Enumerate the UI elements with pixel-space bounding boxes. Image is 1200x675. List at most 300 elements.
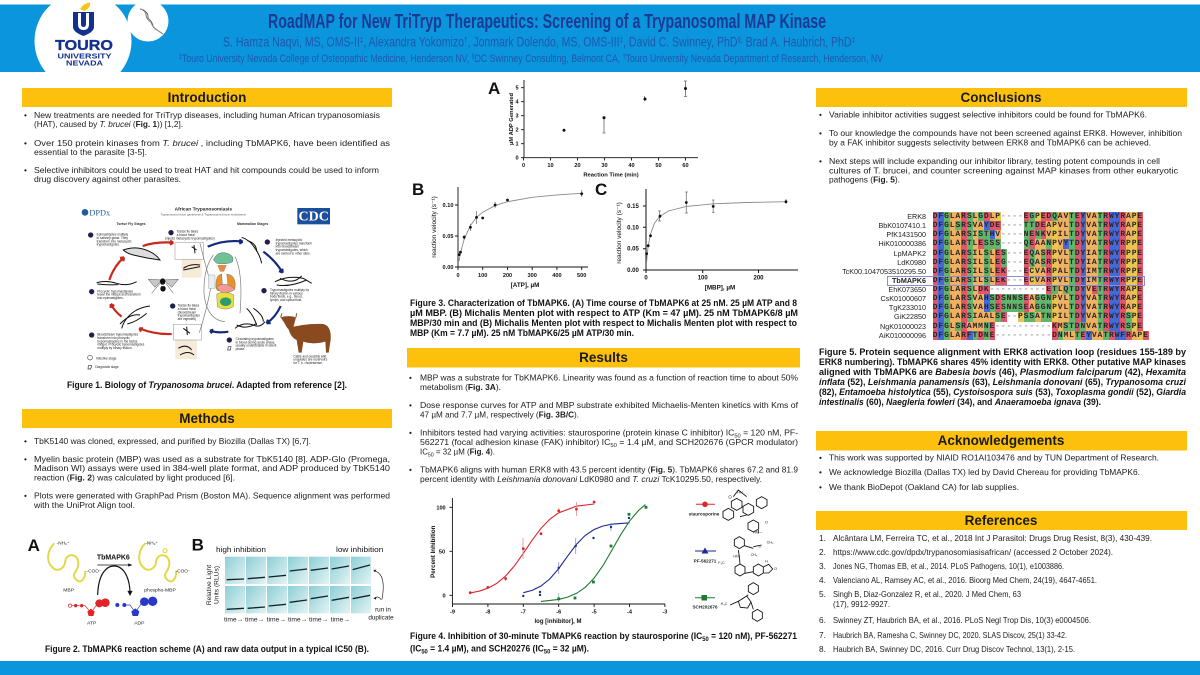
figure 5: sequence alignment: D: [933, 303, 938, 312]
figure 5: sequence alignment: LA: [950, 285, 961, 294]
figure 1: trypanosome life cycle: [82, 207, 331, 369]
figure 5: sequence alignment: R: [1120, 303, 1126, 312]
figure 5: sequence alignment: Y: [1081, 221, 1086, 230]
figure 5: sequence alignment: Q: [1029, 248, 1035, 258]
figure 5: sequence alignment: T: [972, 331, 978, 340]
structure: SCH202676: H₃C: [721, 602, 728, 606]
chart 3A: time course: [488, 79, 698, 178]
figure 5: sequence alignment: D: [933, 230, 938, 239]
chart 3B: ATP Michaelis-Menten: 0.00: [443, 265, 453, 271]
figure 5: sequence alignment: P: [1052, 312, 1058, 321]
figure 5: sequence alignment: S: [1126, 322, 1132, 330]
figure 5: sequence alignment: F: [938, 267, 944, 276]
structure: staurosporine: HN—: [753, 530, 763, 534]
figure 5: sequence alignment: PP: [1126, 267, 1137, 276]
figure 5: sequence alignment: E: [1137, 267, 1143, 276]
figure 5: sequence alignment: Y: [984, 221, 990, 230]
authors: §,: [737, 36, 743, 44]
figure 5: sequence alignment: F: [938, 322, 944, 330]
figure 5: sequence alignment: Y: [1081, 303, 1086, 312]
figure 5: sequence alignment: R: [961, 258, 967, 267]
stage descriptions: multiply by binary fission.: [97, 346, 133, 350]
figure 5: sequence alignment: T: [1069, 239, 1075, 248]
chart: figure 4 dose-response curves: log [inhibitor], M: [534, 619, 582, 625]
authors: ‡: [360, 36, 363, 44]
figure 5: sequence alignment: VA: [1086, 212, 1098, 221]
chart 3B: ATP Michaelis-Menten: 300: [528, 273, 537, 279]
panel: introduction: [22, 88, 392, 390]
PF-562271 curve: [522, 517, 630, 597]
figure 5: sequence alignment: E: [1137, 248, 1143, 258]
figure 5: sequence alignment: S: [984, 248, 990, 258]
figure 5: sequence alignment: IM: [1086, 267, 1098, 276]
text block: conclusions bullets: pathogens (Fig. 5).: [829, 175, 900, 185]
figure 5: sequence alignment: TcK00.1047053510295.50: [842, 267, 926, 276]
figure 5: sequence alignment: WY: [1109, 267, 1120, 276]
text block: results bullets: Fig. 4).: [470, 446, 495, 456]
text block: acknowledgements bullets: We thank BioDepot (Oakland CA) for lab supplies.: [829, 482, 1019, 492]
caption: figure 5: [819, 347, 1187, 407]
chart 3A: time course: Reaction Time (min): [583, 172, 639, 178]
stage descriptions: transform into metacyclic: [97, 239, 132, 243]
figure 5: sequence alignment: ST: [978, 230, 990, 239]
figure 5: sequence alignment: F: [938, 230, 944, 239]
figure 5: sequence alignment: G: [944, 221, 950, 230]
chart 3A: time course: 40: [628, 163, 635, 169]
stage descriptions: Circulating trypomastigotes: [236, 337, 274, 341]
figure 5: sequence alignment: N: [1080, 322, 1086, 330]
figure 5: sequence alignment: SNNS: [1001, 303, 1024, 312]
figure 5: sequence alignment: VA: [972, 221, 984, 230]
staurosporine curve: [469, 501, 595, 594]
figure 5: sequence alignment: R: [1103, 285, 1109, 294]
figure 5: sequence alignment: R: [1046, 258, 1052, 267]
figure 5: sequence alignment: WY: [1109, 303, 1120, 312]
chart 3A: time course: 20: [574, 163, 581, 169]
figure 5: sequence alignment: R: [1046, 276, 1052, 285]
figure 5: sequence alignment: P: [1132, 294, 1137, 303]
text block: results bullets: 47 µM and 7.7 µM, respectively (Fig. 3B/C).: [420, 410, 579, 420]
figure 5: sequence alignment: T: [1098, 322, 1103, 330]
figure 5: sequence alignment: EhK073650: [888, 285, 926, 294]
figure 5: sequence alignment: E: [1137, 221, 1143, 230]
stage descriptions: trypomastigotes: [178, 314, 200, 318]
TbMAPK6 arrows: TbMAPK6: [97, 555, 130, 562]
stage descriptions: into bloodstream: [276, 245, 299, 249]
figure 5: sequence alignment: L: [1058, 285, 1063, 294]
affiliations: DC Swinney Consulting, Belmont CA,: [475, 53, 623, 65]
figure 5: sequence alignment: VA: [1086, 230, 1098, 239]
figure 5: sequence alignment: T: [1098, 221, 1103, 230]
figure 5: sequence alignment: A: [1126, 285, 1132, 294]
text block: reference list: Haubrich BA, Swinney DC, 2016. Curr Drug Discov Technol, 13(1), 2-15.: [833, 644, 1075, 654]
figure 5: sequence alignment: R: [1103, 221, 1109, 230]
figure 5: sequence alignment: T: [1098, 285, 1103, 294]
stage descriptions: Trypomastigotes multiply by: [270, 288, 309, 292]
figure 5: sequence alignment: A: [1126, 212, 1132, 221]
header banner: [0, 0, 1200, 90]
figure 5: sequence alignment: LA: [950, 303, 961, 312]
chart 3B: ATP Michaelis-Menten: 400: [552, 273, 562, 279]
chart 3A: time course: 30: [601, 163, 608, 169]
figure 5: sequence alignment: T: [1103, 331, 1109, 340]
phospho-MBP product: [139, 541, 191, 593]
chart: figure 4 dose-response curves: -4: [627, 610, 633, 616]
figure 5: sequence alignment: F: [967, 331, 972, 340]
authors: , Jonmark Dolendo, MS, OMS-III: [467, 34, 620, 50]
chart: figure 4 dose-response curves: -3: [662, 610, 667, 616]
logo: Touro University Nevada: TOURO: [55, 37, 113, 54]
numbered stage markers: [88, 230, 270, 343]
figure 5: sequence alignment: G: [944, 248, 950, 258]
figure 5: sequence alignment: S: [967, 230, 972, 239]
figure 5: sequence alignment: AA: [1035, 239, 1046, 248]
text block: reference list: 7.: [819, 630, 826, 640]
caption: figure 4: 50: [702, 637, 709, 643]
ATP: [68, 598, 110, 626]
stage descriptions: usually undetectable in latent: [236, 344, 276, 348]
figure 5: sequence alignment: VA: [1086, 239, 1098, 248]
figure 5: sequence alignment: SSS: [984, 239, 1001, 248]
text block: results bullets: •: [409, 400, 412, 410]
figure 5: sequence alignment: EK: [995, 276, 1007, 285]
figure 5: sequence alignment: G: [1029, 212, 1035, 221]
text block: introduction bullets: Selective inhibitors could be used to treat HAT and hit compounds could be used to inform: [34, 165, 379, 175]
figure 5: sequence alignment: IAAL: [972, 312, 995, 321]
figure 5: sequence alignment: WY: [1109, 312, 1120, 321]
chart 3C: MBP Michaelis-Menten: reaction velocity (s⁻¹): [616, 202, 623, 264]
figure 5: sequence alignment: TT: [1024, 221, 1035, 230]
chart 3A: time course: 0: [522, 163, 525, 169]
figure 5: sequence alignment: R: [961, 312, 967, 321]
text block: conclusions bullets: cultures of T. brucei, and counter screening against MAP kinases from other eukaryotic: [829, 165, 1178, 175]
stage descriptions: are carried to other sites.: [276, 251, 311, 255]
figure 5: sequence alignment: S: [967, 294, 972, 303]
figure 5: sequence alignment: G: [944, 312, 950, 321]
figure 5: sequence alignment: GGN: [1035, 294, 1052, 303]
figure 5: sequence alignment: D: [1075, 221, 1081, 230]
figure 5: sequence alignment: P: [1132, 303, 1137, 312]
figure 5: sequence alignment: A: [1126, 294, 1132, 303]
figure 5: sequence alignment: A: [1029, 294, 1035, 303]
figure 5: sequence alignment: WY: [1109, 294, 1120, 303]
text block: reference list: 3.: [819, 561, 826, 571]
heading: methods: [22, 409, 392, 428]
diagram legend: Diagnostic stage: [95, 365, 119, 369]
text block: introduction bullets: •: [24, 165, 27, 175]
caption: figure 3: µM MBP. (B) Michalis Menten plot with respect to ATP (Km = 47 µM). 25 nM TbMAPK6/8 µM: [410, 308, 798, 318]
figure 5: sequence alignment: E: [990, 322, 995, 330]
stage descriptions: Epimastigotes multiply: [97, 233, 128, 237]
chart 3B: ATP Michaelis-Menten: 0.10: [443, 203, 453, 209]
figure 5: sequence alignment: V: [1058, 239, 1063, 248]
legend: SCH202676: SCH202676: [692, 604, 718, 610]
figure 5: sequence alignment: R: [1120, 212, 1126, 221]
figure 5: sequence alignment: TN: [1041, 312, 1052, 321]
figure 5: sequence alignment: D: [978, 331, 984, 340]
figure 5: sequence alignment: Y: [1080, 285, 1086, 294]
chart 3B: ATP Michaelis-Menten: 0.05: [443, 234, 453, 240]
figure 5: sequence alignment: D: [933, 267, 938, 276]
figure 5: sequence alignment: Y: [1081, 230, 1086, 239]
figure 5: sequence alignment: L: [990, 212, 995, 221]
figure 5: sequence alignment: LA: [950, 239, 961, 248]
figure 5: sequence alignment: P: [1052, 230, 1058, 239]
figure 5: sequence alignment: R: [1120, 276, 1126, 285]
authors: Brad A. Haubrich, PhD: [743, 34, 852, 50]
figure 5: sequence alignment: E: [1143, 331, 1149, 340]
figure 5: sequence alignment: A: [1132, 331, 1137, 340]
caption: figure 4: = 120 nM), PF-562271: [709, 631, 797, 641]
figure 5: sequence alignment: T: [1098, 258, 1103, 267]
text block: methods bullets: [24, 436, 390, 510]
affiliations: §: [472, 54, 475, 61]
figure 5: sequence alignment: F: [938, 258, 944, 267]
text block: results bullets: 562271 (focal adhesion kinase (FAK) inhibitor) IC: [420, 437, 601, 447]
ADP: [115, 597, 157, 626]
figure 5: sequence alignment: R: [1103, 312, 1109, 321]
diagram title: Trypanosoma brucei gambiense & Trypanosoma brucei rhodesiense: [161, 213, 247, 217]
figure 5: sequence alignment: VA: [972, 294, 984, 303]
stage descriptions: Bloodstream trypomastigotes: [97, 333, 138, 337]
figure 5: sequence alignment: S: [955, 221, 961, 230]
chart: figure 4 dose-response curves: Percent Inhibition: [430, 525, 437, 578]
figure 5: sequence alignment: F: [938, 303, 944, 312]
chart 3C: MBP Michaelis-Menten: 0.05: [627, 247, 639, 253]
text block: reference list: Valenciano AL, Ramsey AC, et al., 2016. Bioorg Med Chem, 24(19), 4647-4651.: [833, 575, 1097, 585]
chart 3A: time course: A: [488, 79, 500, 98]
diagram legend: Infective stage: [96, 356, 117, 360]
figure 5: sequence alignment: P: [1052, 303, 1058, 312]
text block: methods bullets: Madison WI) assays were used in 384-well plate format, and ADP produced by TbK5140: [34, 463, 390, 473]
figure 2B: raw data plate: B: [192, 536, 204, 555]
figure 5: sequence alignment: M: [1058, 322, 1063, 330]
figure 5: sequence alignment: [842, 212, 1149, 340]
figure 5: sequence alignment: C: [1029, 267, 1035, 276]
text block: reference list: 4.: [819, 575, 826, 585]
figure 5: sequence alignment: VA: [1035, 267, 1046, 276]
caption: figure 4: Figure 4. Inhibition of 30-minute TbMAPK6 reaction by staurosporine (IC: [410, 631, 712, 641]
figure 5: sequence alignment: WY: [1109, 212, 1120, 221]
text block: reference list: Haubrich BA, Ramesha C, Swinney DC, 2020. SLAS Discov, 25(1) 33-42.: [833, 630, 1067, 640]
structure: staurosporine: O: [765, 520, 768, 524]
text block: acknowledgements bullets: •: [819, 482, 822, 492]
figure 5: sequence alignment: PP: [1126, 258, 1137, 267]
chart 3A: time course: 50: [655, 163, 662, 169]
figure 5: sequence alignment: P: [995, 212, 1001, 221]
figure 5: sequence alignment: P: [1052, 258, 1058, 267]
figure 5: sequence alignment: L: [972, 285, 978, 294]
stage descriptions: lymph, and spinal fluid.: [270, 298, 302, 302]
highlight box: TbMAPK6 row: [887, 276, 1145, 286]
figure 5: sequence alignment: R: [1046, 248, 1052, 258]
heading: methods: Methods: [179, 411, 235, 426]
structure: staurosporine: [723, 490, 768, 534]
figure 5: sequence alignment: E: [1024, 212, 1029, 221]
figure 5: sequence alignment: I: [972, 230, 978, 239]
figure 5: sequence alignment: V: [1046, 230, 1052, 239]
authors: †: [464, 36, 467, 44]
figure 5: sequence alignment: T: [1069, 294, 1075, 303]
text block: methods bullets: reaction (Fig. 2) was calculated by light produced [6].: [34, 472, 235, 482]
text block: results bullets: metabolism (Fig. 3A).: [420, 382, 501, 392]
figure 5: sequence alignment: G: [944, 239, 950, 248]
figure 5: sequence alignment: T: [1098, 248, 1103, 258]
time axis labels: time→: [331, 616, 350, 623]
caption: figure 4: (IC: [410, 644, 422, 654]
figure 5: sequence alignment: D: [933, 258, 938, 267]
assay wells: [225, 557, 371, 613]
panel: conclusions: [816, 88, 1187, 407]
figure 5: sequence alignment: D: [1075, 285, 1080, 294]
arrows: tsetse fly stages: [109, 241, 173, 334]
figure 5: sequence alignment: IL: [972, 267, 984, 276]
figure 5: sequence alignment: F: [938, 285, 944, 294]
figure 5: sequence alignment: S: [967, 303, 972, 312]
text block: methods bullets: with the UniProt Align tool.: [33, 500, 135, 510]
figure 5: sequence alignment: WY: [1109, 258, 1120, 267]
figure 5: sequence alignment: F: [938, 312, 944, 321]
figure 5: sequence alignment: R: [1103, 258, 1109, 267]
icon: trypanosome circle: [128, 0, 168, 42]
figure 5: sequence alignment: D: [1075, 230, 1081, 239]
title: RoadMAP for New TriTryp Therapeutics: Screening of a Trypanosomal MAP Kinase: [268, 11, 826, 33]
figure 5: sequence alignment: ST: [1063, 322, 1075, 330]
logo: Touro University Nevada: [34, 0, 132, 90]
icon: DPDx logo: DPDx: [89, 208, 111, 217]
legend: staurosporine: staurosporine: [689, 512, 720, 516]
figure 5: sequence alignment: H: [990, 230, 995, 239]
text block: results bullets: 50: [734, 434, 741, 440]
figure 5: sequence alignment: E: [1024, 303, 1029, 312]
figure 5: sequence alignment: K: [1052, 322, 1058, 330]
figure 2B: raw data plate: low inhibition: [336, 547, 383, 554]
figure 5: sequence alignment: G: [944, 322, 950, 330]
figure 5: sequence alignment: Y: [1063, 239, 1069, 248]
figure 5: sequence alignment: E: [1137, 276, 1143, 285]
chart 3B: ATP Michaelis-Menten: 100: [478, 273, 487, 279]
legend: PF-562271: [694, 537, 777, 576]
heading: acknowledgements: Acknowledgements: [938, 433, 1064, 448]
text block: reference list: Jones NG, Thomas EB, et al., 2014. PLoS Pathogens, 10(1), e1003886.: [833, 561, 1064, 571]
footer bar: [0, 661, 1200, 675]
figure 5: sequence alignment: S: [1041, 248, 1046, 258]
figure 5: sequence alignment: E: [1137, 212, 1143, 221]
figure 5: sequence alignment: ED: [1041, 212, 1052, 221]
text block: reference list: https://www.cdc.gov/dpdx/trypanosomiasisafrican/ (accessed 2 October 2024).: [833, 547, 1113, 557]
figure 5: sequence alignment: E: [1029, 239, 1035, 248]
authors: , Alexandra Yokomizo: [363, 34, 464, 50]
figure 5: sequence alignment: S: [967, 212, 972, 221]
caption: figure 4: = 1.4 µM), and SCH20276 (IC: [428, 644, 545, 654]
figure 5: sequence alignment: R: [1109, 331, 1115, 340]
figure 5: sequence alignment: P: [1052, 221, 1058, 230]
text block: results bullets: Inhibitors tested had varying activities: staurosporine (protein kinase C inhibitor) IC: [420, 428, 723, 438]
chart 3B: ATP Michaelis-Menten: 200: [503, 273, 512, 279]
figure 5: sequence alignment: A: [1035, 258, 1041, 267]
text block: introduction bullets: essential to the parasite [3-5].: [34, 147, 147, 157]
chart: figure 4 dose-response curves: 50: [439, 549, 445, 555]
figure 5: sequence alignment: F: [938, 221, 944, 230]
chart 3C: MBP Michaelis-Menten: 0.15: [627, 204, 639, 210]
figure 5: sequence alignment: S: [967, 285, 972, 294]
figure 5: sequence alignment: N: [984, 331, 990, 340]
figure 5: sequence alignment: T: [1098, 276, 1103, 285]
figure 5: sequence alignment: D: [995, 294, 1001, 303]
figure 5: sequence alignment: LA: [950, 312, 961, 321]
phospho-MBP product: -NH₃⁺: [145, 541, 159, 546]
figure 5: sequence alignment: IM: [1086, 276, 1098, 285]
structure: PF-562271: CH₃: [751, 553, 758, 557]
structure: PF-562271: O: [774, 566, 777, 571]
stage descriptions: (bloodstream: [178, 310, 196, 314]
figure 5: sequence alignment: N: [984, 322, 990, 330]
figure 5: sequence alignment: R: [961, 276, 967, 285]
time axis labels: time→: [288, 616, 307, 623]
text block: conclusions bullets: •: [819, 109, 822, 119]
stage descriptions: transform into procyclic: [97, 336, 130, 340]
text block: results bullets: MBP was a substrate for TbKMAPK6. Linearity was found as a function of reaction time to about 50%: [420, 373, 799, 383]
chart 3A: time course: 3: [515, 114, 519, 120]
figure 5: sequence alignment: E: [1024, 276, 1029, 285]
figure 5: sequence alignment: ERK8: [907, 212, 926, 221]
figure 5: sequence alignment: T: [1069, 276, 1075, 285]
chart 3C: MBP Michaelis-Menten: 200: [753, 276, 764, 282]
structure: PF-562271: HN: [733, 555, 739, 559]
figure 5: sequence alignment: E: [1137, 239, 1143, 248]
chart 3A: time course: 10: [547, 163, 554, 169]
figure 5: sequence alignment: L: [990, 248, 995, 258]
text block: results bullets: •: [409, 465, 412, 475]
chart: figure 4 dose-response curves: -9: [450, 610, 455, 616]
figure 5: sequence alignment: P: [1132, 322, 1137, 330]
text block: results bullets: 50: [428, 452, 434, 458]
figure 5: sequence alignment: D: [1052, 331, 1058, 340]
figure 5: sequence alignment: L: [990, 276, 995, 285]
figure 5: sequence alignment: ---: [1007, 267, 1024, 276]
figure 5: sequence alignment: P: [1052, 267, 1058, 276]
figure 5: sequence alignment: E: [1029, 230, 1035, 239]
stage descriptions: ungulates are reservoirs: [293, 358, 328, 362]
figure 5: sequence alignment: WY: [1109, 230, 1120, 239]
chart 3C: MBP Michaelis-Menten: [MBP], µM: [705, 284, 735, 292]
figure 5: sequence alignment: TgK233010: [889, 303, 926, 312]
chart 3C: MBP Michaelis-Menten: [595, 180, 798, 292]
chart 3B: ATP Michaelis-Menten: 0: [456, 273, 460, 279]
figure 5: sequence alignment: E: [1137, 294, 1143, 303]
stage descriptions: in salivary gland. They: [97, 236, 128, 240]
figure 5: sequence alignment: S: [995, 312, 1001, 321]
chart: figure 4 dose-response curves: 100: [436, 505, 446, 511]
chart: figure 4 dose-response curves: 0: [442, 593, 446, 599]
time axis labels: time→: [224, 616, 243, 623]
figure 5: sequence alignment: PP: [1126, 239, 1137, 248]
figure 5: sequence alignment: D: [933, 248, 938, 258]
figure 5: sequence alignment: LA: [950, 258, 961, 267]
figure 5: sequence alignment: S: [984, 258, 990, 267]
figure 5: sequence alignment: P: [1132, 212, 1137, 221]
text block: methods bullets: Myelin basic protein (MBP) was used as a substrate for TbK5140 [8]. ADP-Glo (Promega,: [34, 454, 390, 464]
figure 5: sequence alignment: R: [961, 331, 967, 340]
stage descriptions: midgut. Procyclic trypomastigotes: [97, 343, 145, 347]
figure 5: sequence alignment: T: [1098, 303, 1103, 312]
stage descriptions: Tsetse fly takes: [177, 230, 198, 234]
figure 5: sequence alignment: LA: [950, 230, 961, 239]
panel: acknowledgements: [816, 431, 1187, 492]
logo: Touro University Nevada: UNIVERSITY: [58, 52, 112, 61]
figure 5: sequence alignment: E: [1024, 258, 1029, 267]
text block: results bullets: TbMAPK6 aligns with human ERK8 with 43.5 percent identity (Fig. 5). TbMAPK6 shares 67.2 and 81.9: [420, 465, 798, 475]
